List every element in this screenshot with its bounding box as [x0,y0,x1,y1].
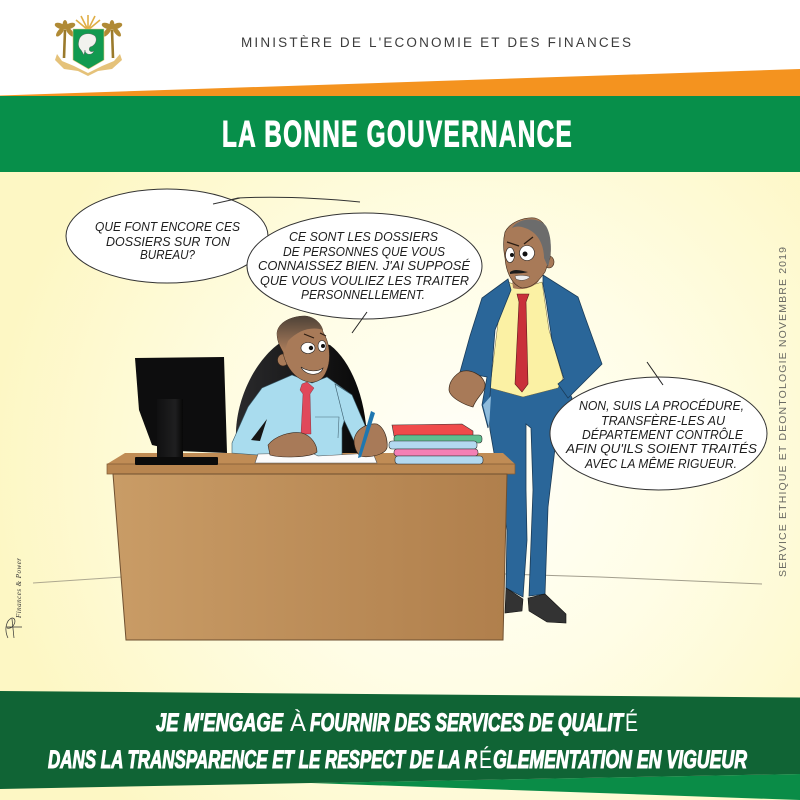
speech bubble: manager question: DOSSIERS SUR TON [106,235,231,249]
computer monitor [135,357,227,465]
shirt [490,282,563,397]
speech bubble: manager instruction: TRANSFÈRE-LES AU [601,413,726,428]
emblem: coat of arms [54,15,123,76]
commitment statement: É [479,745,492,774]
speech bubble: manager instruction: DÉPARTEMENT CONTRÔLE [582,427,744,442]
title banner [0,96,800,172]
floor lines [33,574,762,584]
speech bubble: manager instruction [550,362,767,490]
speech bubble: manager instruction: AVEC LA MÊME RIGUEUR. [584,456,737,471]
speech bubble: employee answer: CE SONT LES DOSSIERS [289,230,439,244]
right sleeve [335,384,367,441]
commitment statement: FOURNIR DES SERVICES DE QUALIT [310,709,625,737]
speech bubble: employee answer [247,213,482,333]
orange wedge [0,69,800,97]
footer banner [0,691,800,800]
pocket [315,417,339,438]
speech bubble: employee answer: DE PERSONNES QUE VOUS [283,245,446,259]
speech bubble: employee answer: QUE VOUS VOULIEZ LES TRAITER [260,274,469,288]
chair gap under arm [251,419,267,441]
artist signature: Finances & Power [15,558,23,619]
hands [268,433,317,457]
speech bubble: manager instruction: NON, SUIS LA PROCÉDURE, [579,398,744,413]
commitment statement: JE M'ENGAGE [156,709,284,737]
artist signature [6,558,23,638]
speech bubble: manager instruction: AFIN QU'ILS SOIENT TRAITÉS [565,441,758,456]
desk [107,453,515,640]
commitment statement [48,708,747,774]
open notebook [255,453,377,463]
commitment statement: DANS LA TRANSPARENCE ET LE RESPECT DE LA R [48,746,477,774]
commitment statement: É [625,708,638,737]
speech bubble: manager question: QUE FONT ENCORE CES [95,220,241,234]
pen [358,411,375,458]
head [504,218,554,289]
speech bubble: manager question: BUREAU? [140,248,195,262]
standing man [449,218,602,623]
speech bubble: manager question [66,189,360,283]
stack of books [389,424,483,464]
main title: LA BONNE GOUVERNANCE [222,114,573,154]
speech bubble: employee answer: PERSONNELLEMENT. [301,288,425,302]
head [277,316,329,382]
page background [0,172,800,800]
jacket lining [483,396,491,428]
commitment statement: À [290,708,306,737]
speech bubble: employee answer: CONNAISSEZ BIEN. J'AI SUPPOSÉ [258,258,471,273]
office chair [236,337,367,453]
shirt [232,375,352,456]
trousers [486,380,572,597]
tie [300,382,314,434]
jacket [460,275,602,428]
tie [515,294,529,392]
vertical credit text: SERVICE ETHIQUE ET DEONTOLOGIE NOVEMBRE 2019 [777,247,789,577]
seated man [232,316,387,463]
header title: ministry name: MINISTÈRE DE L'ECONOMIE ET DES FINANCES [241,35,631,50]
header: white band [0,0,800,96]
hand [449,371,485,407]
shoes [505,588,566,623]
